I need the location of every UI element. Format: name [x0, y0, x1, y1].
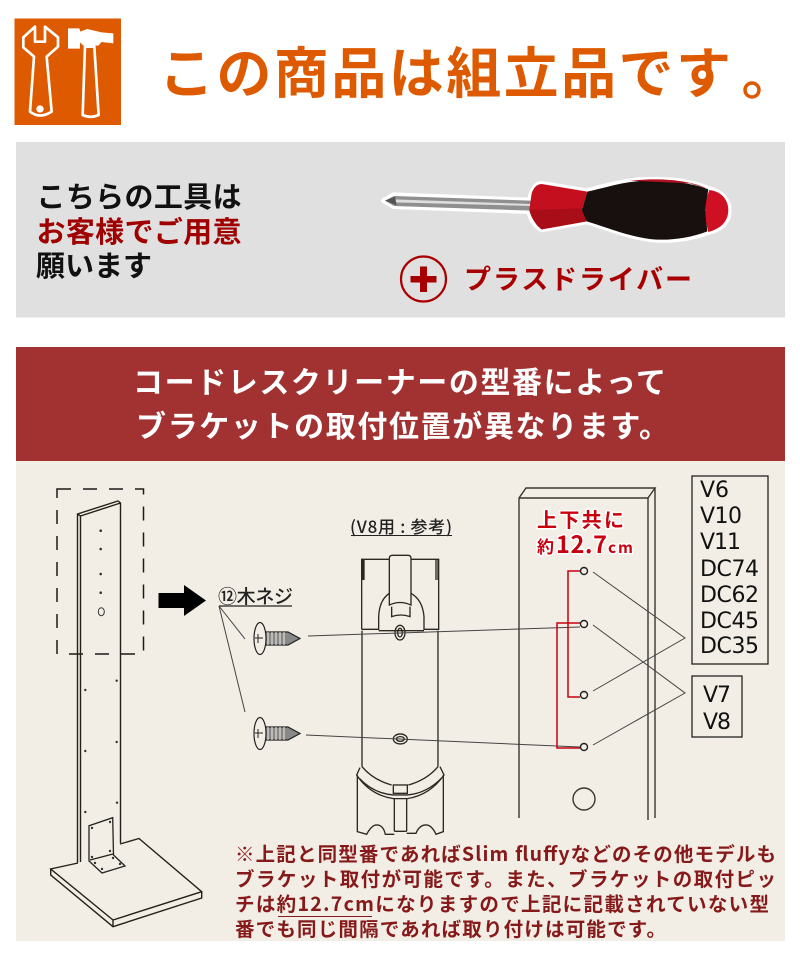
arrow [158, 585, 206, 616]
bracket: 12.7cm pitch [557, 571, 580, 748]
box: model list two: V7 [703, 683, 731, 708]
label: wood screw: ⑫木ネジ [218, 582, 293, 609]
text: tools note: こちらの工具は [36, 174, 242, 216]
callout: pitch: cm [608, 536, 633, 558]
icon: screw top [254, 622, 300, 654]
box: model list one: DC45 [700, 609, 759, 634]
text: tools note: お客様でご用意 [36, 209, 242, 251]
callout: pitch: 約 [537, 533, 554, 558]
diagram: post close-up [519, 488, 685, 820]
icon: screw bottom [254, 718, 300, 750]
box: model list one: DC62 [700, 583, 759, 608]
text: tools note [36, 174, 242, 285]
note text [235, 838, 776, 942]
box: model list two: V8 [703, 710, 731, 735]
note text: ※上記と同型番であればSlim fluffyなどのその他モデルも [235, 838, 776, 867]
callout: pitch: 上下共に [537, 504, 624, 533]
title: この商品は組立品です [159, 29, 731, 109]
label: wood screw [218, 582, 293, 712]
callout: pitch: 12.7 [556, 526, 607, 560]
panel: header band: ブラケットの取付位置が異なります。 [136, 402, 669, 446]
box: model list one: DC35 [700, 634, 759, 659]
panel: header band [16, 347, 785, 461]
label: plus screwdriver: プラスドライバー [464, 258, 692, 297]
diagram: stand [51, 489, 202, 927]
text: tools note: 願います [36, 243, 152, 285]
box: model list one [692, 476, 768, 664]
icon: plus circle [401, 256, 446, 302]
callout: pitch [537, 504, 633, 560]
icon: screwdriver [383, 179, 729, 241]
box: model list two [692, 676, 742, 737]
box: model list one: DC74 [700, 557, 759, 582]
box: model list one: V11 [700, 530, 741, 555]
panel: tools required [16, 142, 785, 318]
note text: チは約12.7cmになりますので上記に記載されていない型 [235, 888, 769, 917]
note text: ブラケット取付が可能です。また、ブラケットの取付ピッ [235, 863, 776, 892]
leader lines: screws to holes [306, 627, 580, 747]
panel: header band: コードレスクリーナーの型番によって [133, 358, 666, 402]
box: model list one: V10 [700, 504, 742, 529]
panel: diagram background [16, 461, 785, 941]
box: model list one: V6 [700, 478, 729, 503]
icon: wrench and hammer [14, 18, 121, 125]
note text: 番でも同じ間隔であれば取り付けは可能です。 [235, 913, 666, 942]
label: V8 reference: (V8用 : 参考) [350, 513, 452, 538]
diagram: cleaner bracket [357, 555, 444, 834]
